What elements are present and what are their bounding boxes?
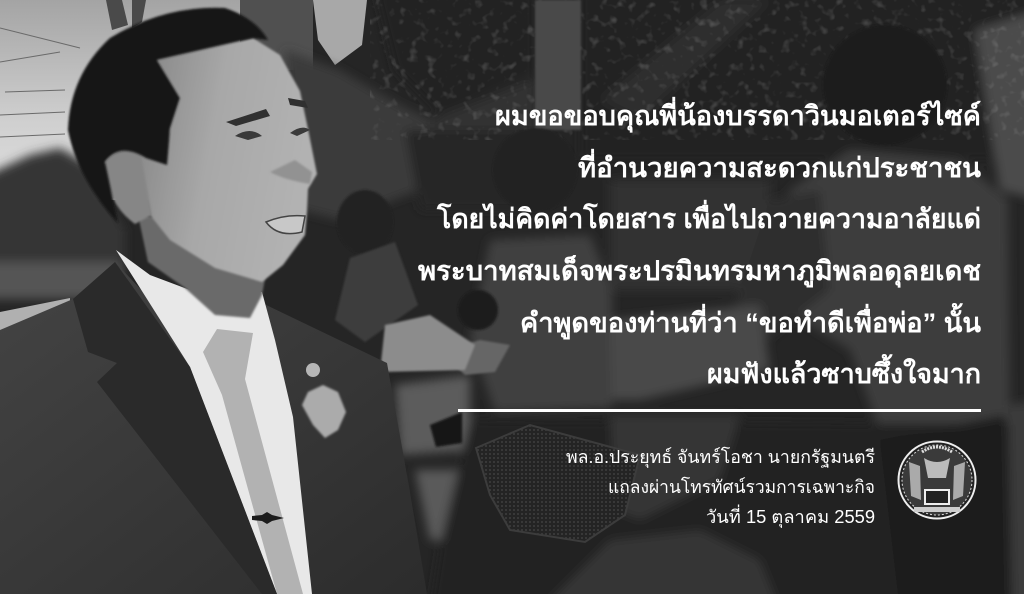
- tie clip: [252, 512, 284, 524]
- rider far vest: [335, 242, 418, 342]
- ear: [103, 149, 152, 224]
- attribution text: [566, 446, 875, 528]
- quote text: คำพูดของท่านที่ว่า “ขอทำดีเพื่อพ่อ” นั้น: [520, 302, 982, 340]
- nose shadow: [270, 160, 312, 184]
- quote text: [418, 96, 982, 389]
- power lines: [0, 28, 80, 137]
- dark scooter panel: [430, 412, 462, 447]
- sky trunk: [106, 0, 146, 30]
- flower brooch: [302, 385, 346, 438]
- rider left helmet: [493, 128, 577, 212]
- necktie: [203, 329, 303, 594]
- scooter left: [380, 315, 475, 372]
- hair: [68, 8, 268, 223]
- hand and glove: [440, 340, 510, 375]
- front basket: [476, 425, 640, 542]
- attribution text: วันที่ 15 ตุลาคม 2559: [706, 504, 875, 528]
- neck: [138, 215, 268, 318]
- pole: [535, 0, 581, 130]
- quote text: พระบาทสมเด็จพระปรมินทรมหาภูมิพลอดุลยเดช: [418, 253, 981, 288]
- attribution text: พล.อ.ประยุทธ์ จันทร์โอชา นายกรัฐมนตรี: [566, 446, 875, 468]
- quote text: ที่อำนวยความสะดวกแก่ประชาชน: [578, 148, 982, 183]
- eyebrows: [226, 98, 308, 126]
- lapel: [73, 262, 277, 594]
- quote text: ผมขอขอบคุณพี่น้องบรรดาวินมอเตอร์ไซค์: [495, 96, 981, 133]
- eyes: [235, 128, 310, 140]
- lapel pin: [306, 363, 320, 377]
- quote text: ผมฟังแล้วซาบซึ้งใจมาก: [707, 353, 981, 389]
- mouth: [266, 216, 305, 234]
- face: [135, 38, 317, 282]
- sky left: [0, 0, 240, 200]
- divider rule: [458, 409, 981, 412]
- tree behind head top: [240, 0, 313, 70]
- quote text: โดยไม่คิดค่าโดยสาร เพื่อไปถวายความอาลัยแด่: [436, 199, 981, 234]
- road: [0, 298, 70, 332]
- rider right helmet: [823, 25, 947, 145]
- icon: government seal: [898, 442, 976, 518]
- microphone: [458, 290, 498, 330]
- suit jacket: [0, 262, 427, 594]
- attribution text: แถลงผ่านโทรทัศน์รวมการเฉพาะกิจ: [608, 476, 875, 497]
- foliage speckle: [370, 0, 1024, 140]
- sky gap: [313, 0, 367, 65]
- portrait of the prime minister: [0, 8, 427, 594]
- shirt: [116, 250, 312, 594]
- rider far helmet: [337, 190, 393, 254]
